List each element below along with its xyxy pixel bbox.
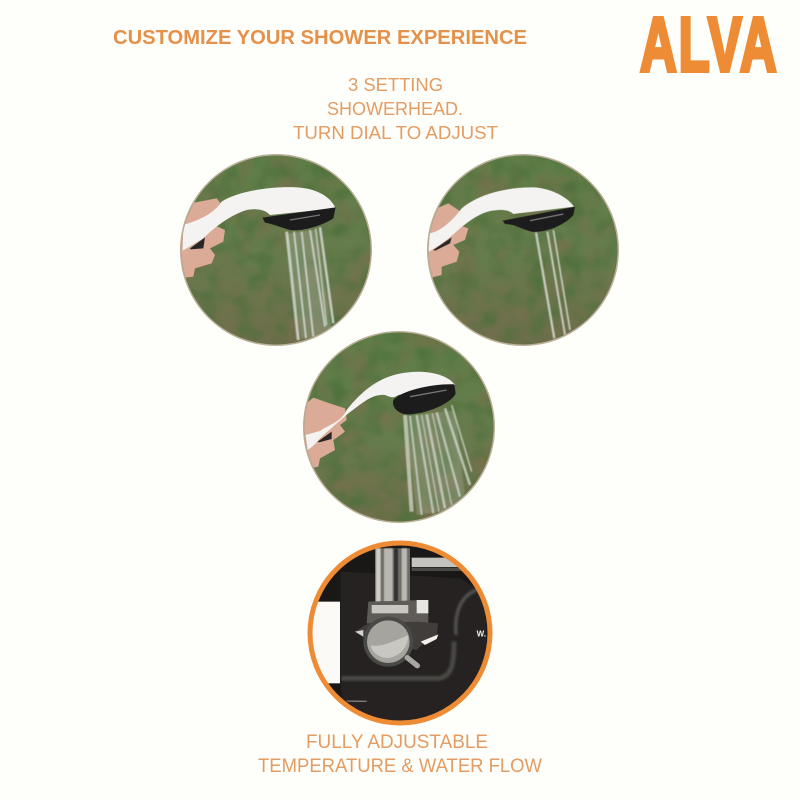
valve collar (367, 600, 428, 623)
hand (180, 198, 225, 278)
heading: showerhead settings: TURN DIAL TO ADJUST (293, 122, 498, 143)
valve wings (355, 622, 438, 650)
heading: showerhead settings (293, 74, 498, 143)
logo: ALVA: ALVA (640, 1, 777, 88)
dark body panel (341, 572, 487, 722)
heading: showerhead settings: 3 SETTING (348, 74, 443, 95)
label fragment on body: W. (477, 629, 486, 638)
hand (303, 398, 347, 468)
photo: narrow jet setting (427, 154, 619, 346)
title: CUSTOMIZE YOUR SHOWER EXPERIENCE (113, 26, 527, 49)
vertical chrome pipe (375, 548, 410, 602)
dial handle (407, 658, 417, 666)
hand (428, 203, 468, 278)
caption: adjustable temperature and flow (258, 732, 542, 777)
caption: adjustable temperature and flow: FULLY ADJUSTABLE (306, 732, 488, 753)
white gap left of the valve body (310, 602, 340, 683)
photo: wide spray setting (180, 154, 372, 346)
photo: full spray setting (303, 331, 495, 523)
caption: adjustable temperature and flow: TEMPERATURE & WATER FLOW (258, 756, 542, 777)
heading: showerhead settings: SHOWERHEAD. (327, 98, 463, 119)
valve dial (363, 617, 413, 667)
photo: valve with orange ring (300, 535, 500, 730)
horizontal chrome rod (412, 558, 462, 567)
